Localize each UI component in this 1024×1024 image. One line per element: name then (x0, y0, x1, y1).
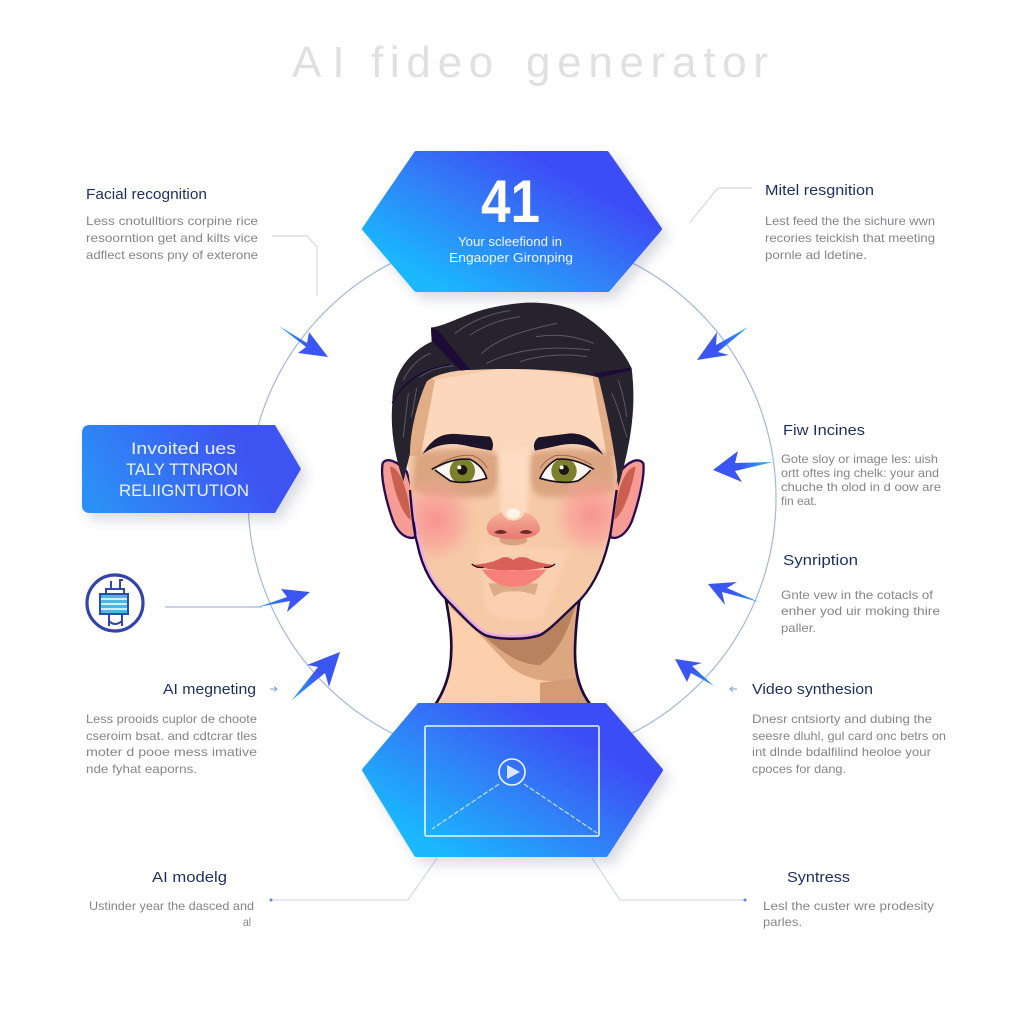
text: video synthesion: seesre dluhl, gul card onc betrs on (752, 729, 946, 743)
text: video synthesion: int dlnde bdalfilind heoloe your (752, 745, 931, 759)
bottom hexagon video player (364, 705, 661, 855)
connector: syntress (592, 858, 746, 902)
arrow: right 3 (675, 659, 714, 686)
text: synription (781, 552, 940, 635)
neck (433, 590, 593, 707)
icon: circuit chip (87, 575, 143, 631)
text: synription: enher yod uir moking thire (781, 604, 940, 618)
text: AI modelg: al (243, 915, 251, 929)
nose (487, 493, 540, 545)
badge caption (449, 235, 573, 265)
text: fiw incines: Gote sloy or image les: uish (781, 452, 938, 466)
face (408, 369, 618, 640)
left pentagon label (82, 425, 301, 513)
title: generator (526, 38, 775, 87)
text: syntress: Syntress (787, 869, 850, 886)
title: fideo (371, 38, 500, 87)
text: synription: paller. (781, 621, 816, 635)
text: facial recognition: resoorntion get and kilts vice (86, 231, 258, 245)
text: mitel resgnition: Mitel resgnition (765, 182, 874, 199)
text: facial recognition (86, 186, 258, 262)
text: AI megneting (86, 681, 277, 776)
text: fiw incines: chuche th olod in d oow are (781, 480, 941, 494)
right eye (540, 455, 594, 484)
pentagon text: Invoited ues (131, 439, 236, 458)
central ring (248, 234, 776, 762)
text: facial recognition: Facial recognition (86, 186, 207, 203)
text: video synthesion: Video synthesion (752, 681, 873, 698)
arrow: left with line (165, 589, 310, 612)
pentagon text: TALY TTNRON (126, 460, 238, 479)
text: fiw incines: ortt oftes ing chelk: your and (781, 466, 939, 480)
text: video synthesion: Dnesr cntsiorty and dubing the (752, 712, 932, 726)
text: syntress: Lesl the custer wre prodesity (763, 899, 934, 913)
pentagon text (119, 439, 249, 500)
arrow: lower left (292, 652, 340, 700)
text: mitel resgnition: pornle ad ldetine. (765, 248, 867, 262)
badge caption: Engaoper Gironping (449, 251, 573, 265)
text: AI megneting: AI megneting (163, 681, 256, 698)
text: syntress: parles. (763, 915, 802, 929)
play icon (499, 759, 525, 785)
arrow: right 2 (708, 582, 759, 605)
text: AI modelg: Ustinder year the dasced and (89, 899, 254, 913)
text: AI modelg: AI modelg (152, 869, 227, 886)
text: AI megneting: nde fyhat eaporns. (86, 762, 197, 776)
text: mitel resgnition: Lest feed the the sichure wwn (765, 214, 935, 228)
arrow: upper right (697, 327, 748, 360)
text: AI modelg (89, 869, 254, 929)
title: AI (292, 38, 356, 87)
video frame (425, 726, 599, 836)
text: AI megneting: moter d pooe mess imative (86, 745, 257, 759)
top hexagon badge (364, 153, 660, 290)
text: AI megneting: cseroim bsat. and cdtcrar tles (86, 729, 257, 743)
text: fiw incines: Fiw Incines (783, 422, 865, 439)
character portrait (382, 303, 644, 707)
left eye (432, 455, 487, 484)
text: AI megneting: Less prooids cuplor de choote (86, 712, 257, 726)
text: fiw incines: fin eat. (781, 494, 817, 508)
badge number: 41 (481, 168, 540, 235)
connector: AI modelg (270, 858, 437, 902)
text: synription: Gnte vew in the cotacls of (781, 588, 934, 602)
text: video synthesion (730, 681, 946, 776)
text: video synthesion: cpoces for dang. (752, 762, 846, 776)
right eyebrow (534, 433, 603, 455)
pentagon text: RELIIGNTUTION (119, 481, 249, 500)
text: syntress (763, 869, 934, 929)
text: facial recognition: adflect esons pny of exterone (86, 248, 258, 262)
perspective lines (432, 784, 597, 833)
hair (392, 303, 633, 487)
left eyebrow (423, 434, 493, 454)
badge caption: Your scleefiond in (458, 235, 562, 249)
text: synription: Synription (783, 552, 858, 569)
connector: facial recognition (272, 236, 317, 296)
connector: mitel resgnition (690, 188, 752, 222)
text: mitel resgnition: recories teickish that meeting (765, 231, 935, 245)
arrow: upper left (279, 326, 328, 357)
arrow: right 1 (713, 451, 773, 482)
text: facial recognition: Less cnotulltiors corpine rice (86, 214, 258, 228)
mouth (472, 557, 555, 597)
right ear (608, 460, 644, 538)
left ear (382, 460, 417, 538)
text: fiw incines (781, 422, 941, 508)
text: mitel resgnition (765, 182, 935, 262)
